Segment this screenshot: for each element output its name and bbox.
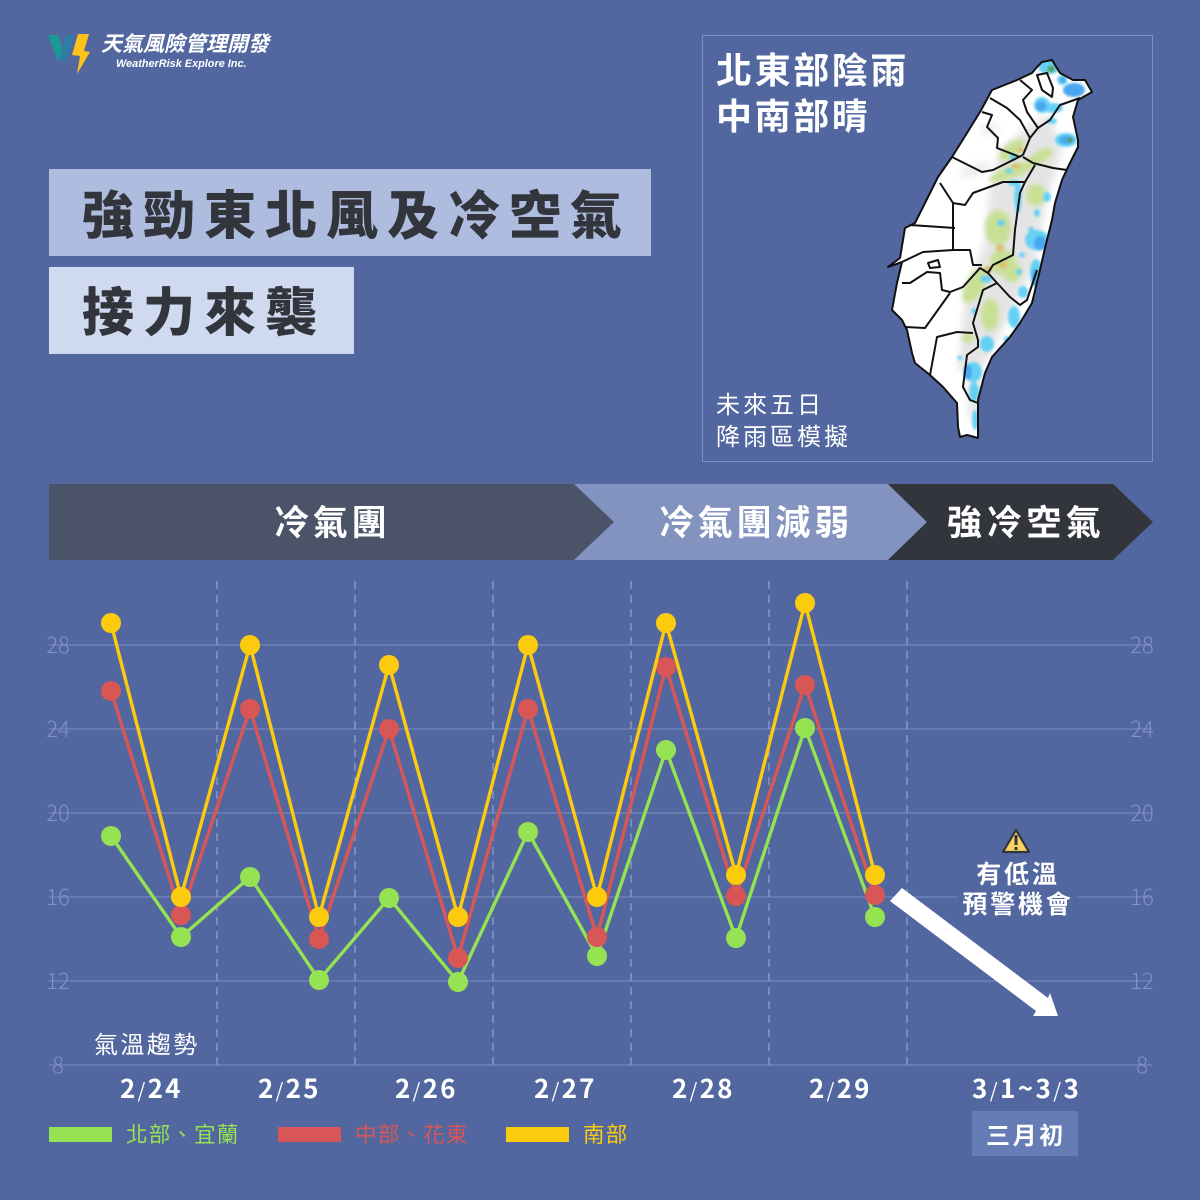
logo english name: WeatherRisk Explore Inc. <box>116 58 247 70</box>
left axis labels: 8 <box>52 1048 64 1080</box>
icon: logo mark <box>48 34 90 74</box>
date labels: 2/28 <box>672 1069 735 1106</box>
phase: strong cold air <box>888 484 1153 560</box>
right axis labels: 16 <box>1130 880 1154 912</box>
phase: cold air mass: 冷氣團 <box>274 495 390 546</box>
warning text: 預警機會 <box>962 885 1074 921</box>
phase: strong cold air: 強冷空氣 <box>947 495 1105 546</box>
legend: central and Hualien-Taitung <box>278 1118 469 1149</box>
logo name: 天氣風險管理開發 <box>101 28 272 58</box>
date labels: 2/26 <box>395 1069 458 1106</box>
date labels: 2/24 <box>120 1069 183 1106</box>
panel: rainfall map <box>702 36 1152 462</box>
logo <box>48 28 272 74</box>
map caption: 未來五日 <box>716 385 824 420</box>
arrow: downward trend <box>890 888 1058 1016</box>
right axis labels: 24 <box>1130 712 1154 744</box>
left axis labels: 28 <box>46 628 70 660</box>
title line 2: 接力來襲 <box>82 271 326 346</box>
label: early March <box>972 1111 1078 1156</box>
map of Taiwan <box>888 60 1092 438</box>
warning text: 有低溫 <box>976 855 1060 891</box>
map heading: 北東部陰雨 <box>716 42 909 94</box>
date labels <box>120 1069 1081 1106</box>
legend: south <box>506 1118 628 1149</box>
legend: south: 南部 <box>583 1118 628 1149</box>
left axis labels <box>46 628 70 1080</box>
phase: cold air mass <box>49 484 614 560</box>
left axis labels: 12 <box>46 964 70 996</box>
phase: cold air mass weakening <box>574 484 927 560</box>
right axis labels: 8 <box>1136 1048 1148 1080</box>
chart label: 氣溫趨勢 <box>94 1025 200 1060</box>
series: south <box>101 593 885 927</box>
label: early March: 三月初 <box>986 1116 1066 1151</box>
date labels: 2/29 <box>809 1069 872 1106</box>
right axis labels: 28 <box>1130 628 1154 660</box>
title line 2 <box>49 267 354 354</box>
date labels: 2/27 <box>534 1069 597 1106</box>
right axis labels: 12 <box>1130 964 1154 996</box>
chart: temperature trend <box>46 581 1154 1080</box>
map heading: 中南部晴 <box>716 88 870 140</box>
right axis labels: 20 <box>1130 796 1154 828</box>
date labels: 3/1~3/3 <box>972 1069 1081 1106</box>
date labels: 2/25 <box>258 1069 321 1106</box>
title line 1: 強勁東北風及冷空氣 <box>82 174 631 249</box>
icon: warning triangle <box>1003 830 1029 852</box>
legend: central and Hualien-Taitung: 中部、花東 <box>355 1118 469 1149</box>
legend: north and Yilan <box>49 1118 240 1149</box>
right axis labels <box>1130 628 1154 1080</box>
legend: north and Yilan: 北部、宜蘭 <box>126 1118 240 1149</box>
callout: low temperature warning <box>890 830 1077 1016</box>
timeline banner <box>49 484 1153 560</box>
series: central and Hualien-Taitung <box>101 657 885 968</box>
left axis labels: 16 <box>46 880 70 912</box>
series: north and Yilan <box>101 718 885 992</box>
left axis labels: 20 <box>46 796 70 828</box>
left axis labels: 24 <box>46 712 70 744</box>
phase: cold air mass weakening: 冷氣團減弱 <box>659 495 853 546</box>
legend <box>49 1118 628 1149</box>
map caption: 降雨區模擬 <box>716 417 851 452</box>
